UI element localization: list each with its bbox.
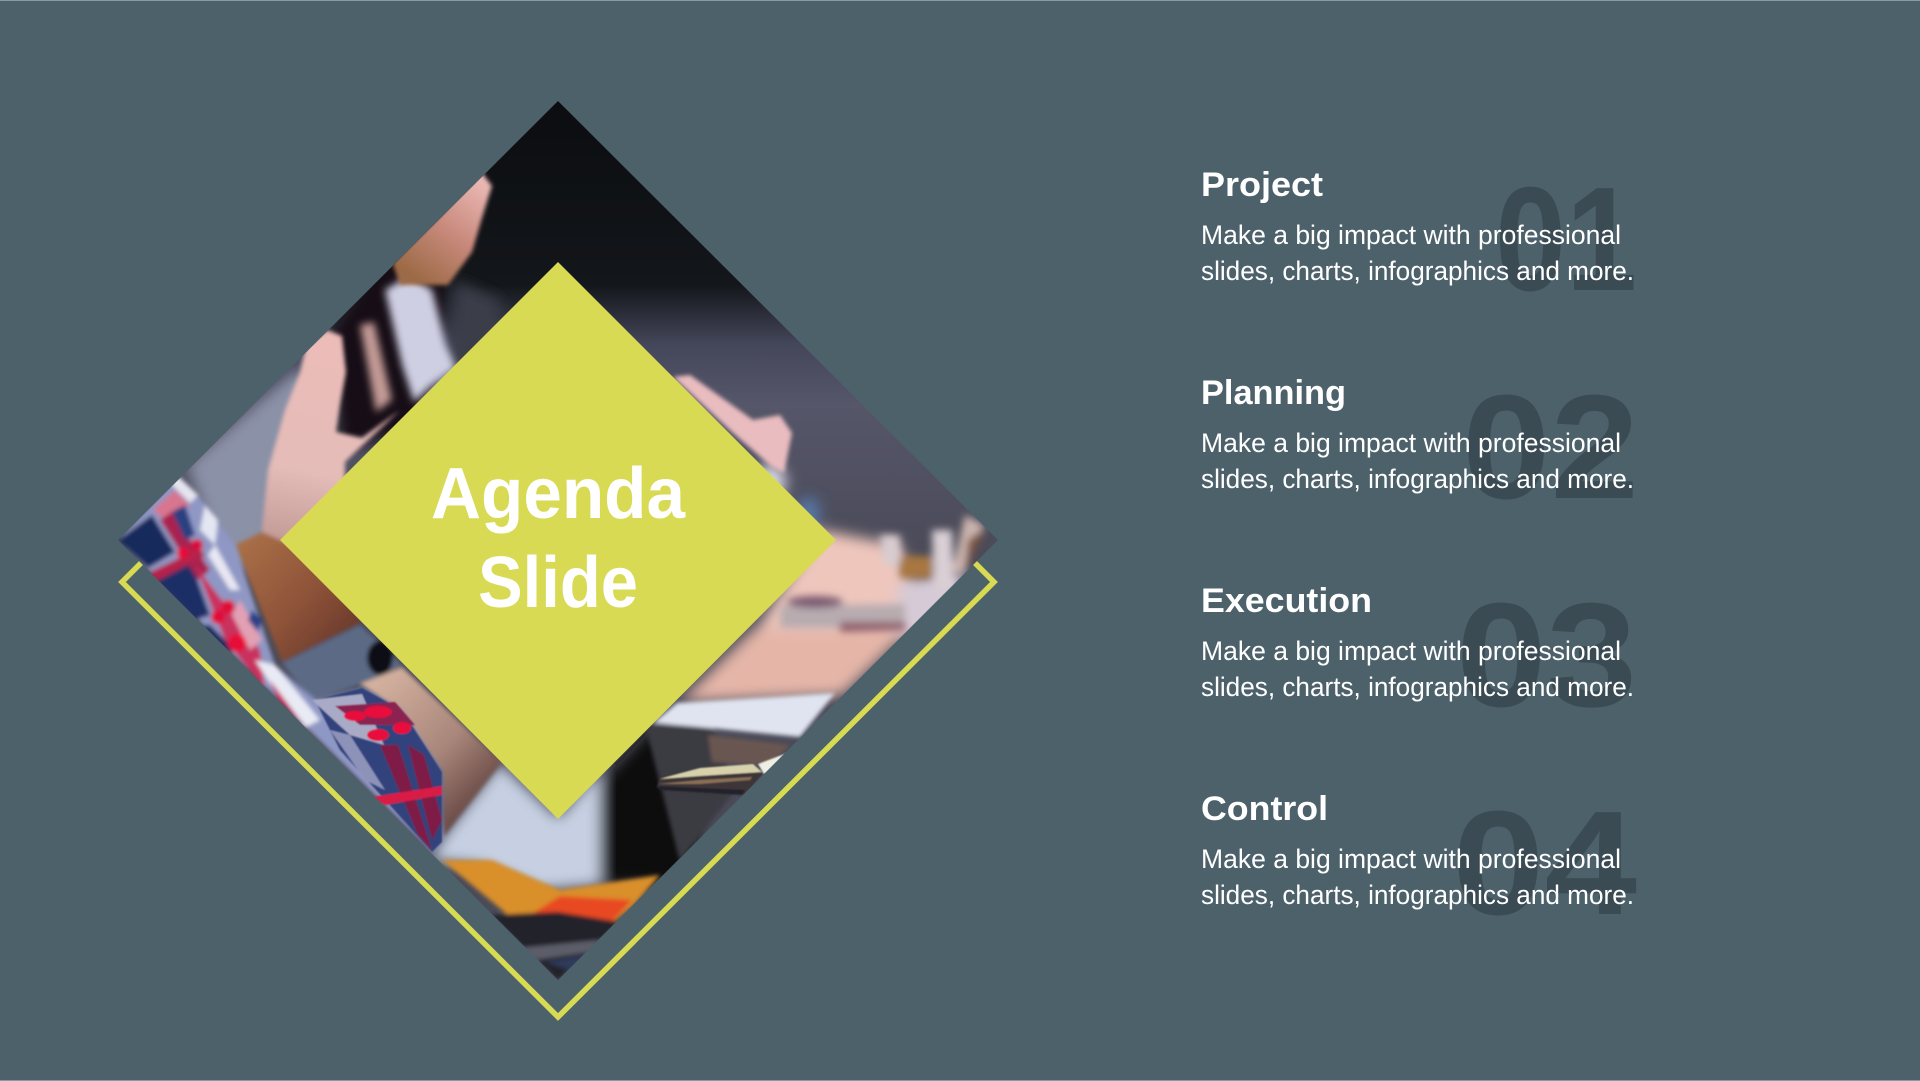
agenda item 04: Control [1201,781,1637,946]
photo diamond: meeting hands [118,101,998,980]
yellow outline diamond behind photo [122,146,994,1017]
heading Control: Control [1201,790,1328,828]
description: slides, charts, infographics and more. [1201,880,1634,910]
number 03: 03 [1456,573,1637,738]
title [431,454,686,623]
description [1201,220,1634,286]
top edge line [0,0,1920,1]
description [1201,636,1634,702]
description: Make a big impact with professional [1201,844,1621,874]
agenda item 01: Project [1201,157,1637,322]
number 01: 01 [1495,157,1637,322]
description [1201,844,1634,910]
number 02: 02 [1462,365,1639,530]
description: Make a big impact with professional [1201,220,1621,250]
heading Planning: Planning [1201,374,1346,412]
description: slides, charts, infographics and more. [1201,256,1634,286]
yellow centre diamond [280,262,836,819]
description: Make a big impact with professional [1201,428,1621,458]
heading Execution: Execution [1201,582,1372,620]
description [1201,428,1634,494]
shirt cuff [312,688,442,852]
number 04: 04 [1452,781,1637,946]
description: slides, charts, infographics and more. [1201,672,1634,702]
title: Slide [478,543,638,623]
agenda item 02: Planning [1201,365,1639,530]
description: Make a big impact with professional [1201,636,1621,666]
plaid shirt [118,475,442,852]
heading Project: Project [1201,166,1323,204]
notebook [655,753,787,795]
bottom edge line [0,1080,1920,1081]
title: Agenda [431,454,686,534]
agenda item 03: Execution [1201,573,1637,738]
description: slides, charts, infographics and more. [1201,464,1634,494]
